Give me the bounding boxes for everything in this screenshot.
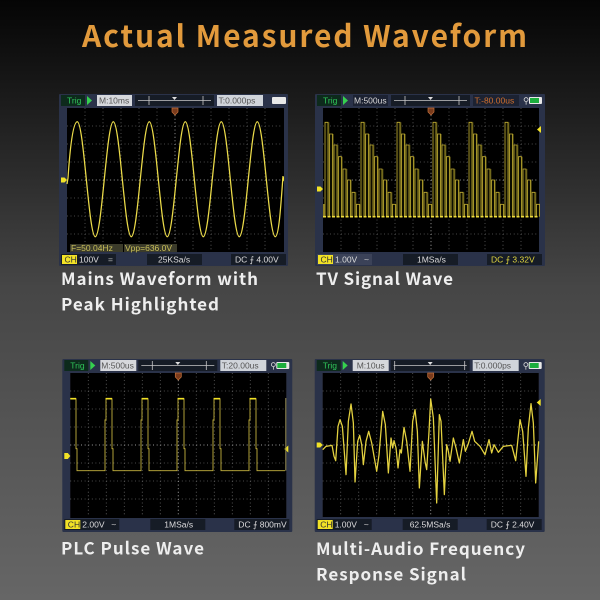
channel level markers <box>61 176 284 182</box>
bottom status bar: 100V <box>79 254 99 264</box>
top status bar <box>64 360 289 371</box>
channel level markers <box>317 399 541 448</box>
top status bar: M:500us <box>101 360 134 370</box>
trigger marker <box>428 108 434 115</box>
top status bar: M:10ms <box>99 96 129 106</box>
panel: multi-audio signal <box>315 359 545 532</box>
bottom status bar: DC ⨍ 3.32V <box>491 254 535 264</box>
top status bar: ⚲ <box>270 360 277 370</box>
bottom status bar <box>317 519 542 530</box>
waveform: staircase bars <box>323 122 540 217</box>
caption: multi-audio signal: Response Signal <box>316 560 466 586</box>
top status bar: Trig <box>70 360 85 370</box>
top status bar: M:10us <box>357 360 385 370</box>
panel: PLC pulse <box>62 359 292 532</box>
top status bar: M:500us <box>354 96 387 106</box>
bottom status bar: 1.00V <box>335 520 357 530</box>
top status bar: Trig <box>323 96 338 106</box>
bottom status bar: ~ <box>111 520 116 530</box>
waveform: sine <box>67 122 283 237</box>
frequency readout <box>70 243 177 253</box>
bottom status bar: DC ⨍ 4.00V <box>235 254 279 264</box>
bottom status bar: = <box>108 254 113 264</box>
top status bar: Trig <box>67 96 82 106</box>
bottom status bar: CH <box>68 520 80 530</box>
bezel <box>62 359 292 532</box>
bottom status bar: 62.5MSa/s <box>410 520 450 530</box>
bezel <box>315 359 545 532</box>
top status bar <box>317 360 542 371</box>
top status bar: T:0.000ps <box>218 96 255 106</box>
bottom status bar: ~ <box>364 254 369 264</box>
top status bar: T:-80.00us <box>474 96 514 106</box>
top status bar: ⚲ <box>523 360 529 370</box>
plot area <box>67 108 284 252</box>
trigger marker <box>428 373 434 380</box>
bezel <box>315 94 545 266</box>
bottom status bar: CH <box>320 520 332 530</box>
bottom status bar: DC ⨍ 2.40V <box>491 520 535 530</box>
top status bar: T:20.00us <box>222 360 259 370</box>
bottom status bar: DC ⨍ 800mV <box>238 520 287 530</box>
caption: mains waveform: Peak Highlighted <box>61 290 219 316</box>
top status bar: ⚲ <box>523 96 529 106</box>
bottom status bar: 1MSa/s <box>164 520 193 530</box>
title: Actual Measured Waveform <box>81 12 527 56</box>
bottom status bar: 2.00V <box>82 520 105 530</box>
plot area <box>70 373 286 518</box>
frequency readout: Vpp=636.0V <box>125 243 172 253</box>
waveform: pulse <box>70 398 286 471</box>
plot area <box>323 108 539 252</box>
top status bar: T:0.000ps <box>474 360 511 370</box>
top status bar: Trig <box>323 360 337 370</box>
top status bar <box>61 95 286 106</box>
panel: mains waveform <box>59 94 288 266</box>
bottom status bar: ~ <box>364 520 369 530</box>
bottom status bar: CH <box>320 254 333 264</box>
caption: multi-audio signal <box>316 535 525 586</box>
bottom status bar: CH <box>64 254 77 264</box>
trigger marker <box>175 373 181 380</box>
panel: TV signal <box>315 94 545 266</box>
caption: multi-audio signal: Multi-Audio Frequency <box>316 535 525 560</box>
bezel <box>59 94 288 266</box>
plot area <box>323 373 539 517</box>
top status bar <box>317 95 542 106</box>
bottom status bar <box>317 254 542 265</box>
caption: mains waveform <box>61 265 258 316</box>
bottom status bar: 1.00V <box>335 254 358 264</box>
bottom status bar <box>61 254 286 265</box>
caption: TV signal: TV Signal Wave <box>316 265 453 290</box>
frequency readout: F=50.04Hz <box>71 243 113 253</box>
trigger marker <box>172 108 178 115</box>
channel level markers <box>317 126 541 192</box>
waveform: audio <box>323 399 539 503</box>
bottom status bar: 1MSa/s <box>417 254 446 264</box>
bottom status bar <box>64 519 289 530</box>
caption: mains waveform: Mains Waveform with <box>61 265 258 290</box>
bottom status bar: 25KSa/s <box>158 254 190 264</box>
channel level markers <box>64 446 288 459</box>
caption: PLC pulse: PLC Pulse Wave <box>61 534 204 560</box>
